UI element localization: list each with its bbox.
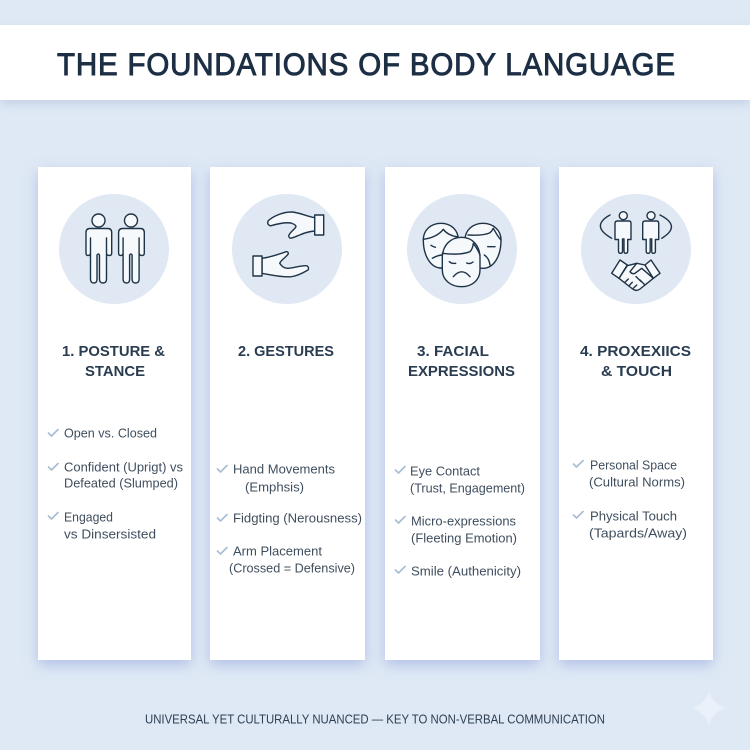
checklist: Arm Placement — [233, 544, 322, 558]
checklist: vs Dinsersisted — [64, 526, 156, 542]
title: THE FOUNDATIONS OF BODY LANGUAGE — [57, 47, 675, 82]
icon: two standing figures — [59, 194, 169, 304]
icon: three faces — [407, 194, 517, 304]
checklist: Physical Touch — [590, 508, 677, 524]
checklist: Personal Space — [590, 458, 677, 472]
icon: sparkle — [692, 692, 726, 725]
checklist: Open vs. Closed — [64, 426, 157, 440]
heading: 2. GESTURES — [238, 343, 334, 360]
heading: & TOUCH — [601, 363, 672, 380]
checklist — [574, 458, 687, 540]
checklist: (Crossed = Defensive) — [229, 560, 355, 576]
checklist: Engaged — [64, 510, 113, 524]
heading: 4. PROXEXIICS — [580, 343, 691, 360]
checklist — [48, 426, 183, 542]
panel: facial expressions — [385, 167, 540, 660]
checklist: Defeated (Slumped) — [64, 476, 178, 490]
icon: figures and handshake — [581, 194, 691, 304]
heading — [62, 343, 165, 380]
heading: STANCE — [85, 363, 145, 380]
footer text: UNIVERSAL YET CULTURALLY NUANCED — KEY TO NON-VERBAL COMMUNICATION — [145, 712, 605, 726]
checklist: (Tapards/Away) — [589, 526, 687, 540]
icon: two open hands — [232, 194, 342, 304]
heading: 1. POSTURE & — [62, 343, 165, 360]
heading — [580, 343, 691, 380]
checklist: Fidgting (Nerousness) — [233, 510, 362, 526]
panel: gestures — [210, 167, 365, 660]
checklist: Micro-expressions — [411, 514, 516, 528]
checklist: (Fleeting Emotion) — [411, 530, 517, 546]
checklist: (Trust, Engagement) — [410, 480, 525, 496]
checklist: (Cultural Norms) — [589, 474, 685, 490]
checklist: Smile (Authenicity) — [411, 564, 521, 578]
heading — [408, 343, 515, 380]
checklist — [218, 462, 362, 576]
checklist: Confident (Uprigt) vs — [64, 460, 183, 474]
title banner — [0, 25, 750, 100]
checklist — [396, 464, 525, 578]
checklist: Eye Contact — [410, 464, 480, 478]
heading: EXPRESSIONS — [408, 363, 515, 380]
heading: 3. FACIAL — [417, 343, 489, 360]
panel: proxemics and touch — [559, 167, 713, 660]
checklist: (Emphsis) — [245, 480, 304, 494]
checklist: Hand Movements — [233, 462, 335, 476]
panel: posture and stance — [38, 167, 191, 660]
